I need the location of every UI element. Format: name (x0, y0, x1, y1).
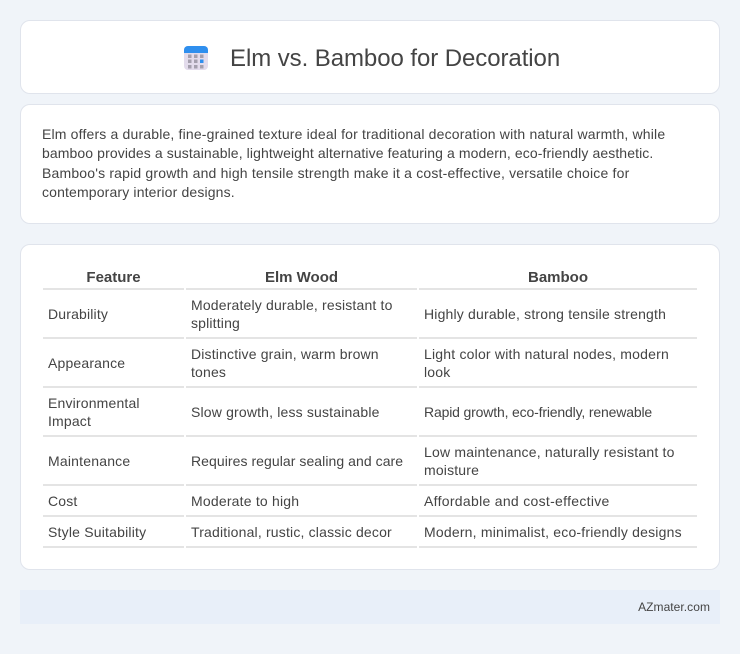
row: style suitability: Traditional, rustic, classic decor (191, 524, 392, 540)
row: durability (43, 297, 697, 339)
row: durability: Highly durable, strong tensile strength (424, 306, 666, 322)
row: environmental impact: Rapid growth, eco-friendly, renewable (424, 404, 652, 420)
row: environmental impact: Impact (48, 413, 91, 429)
table header: Bamboo (528, 269, 588, 286)
intro paragraph: contemporary interior designs. (42, 184, 235, 200)
intro paragraph: Elm offers a durable, fine-grained texture ideal for traditional decoration with natural warmth, while (42, 126, 665, 142)
icon: calendar (184, 46, 208, 70)
row: cost: Moderate to high (191, 493, 299, 509)
intro paragraph: bamboo provides a sustainable, lightweight alternative featuring a modern, eco-friendly aesthetic. (42, 145, 653, 161)
row: appearance: Appearance (48, 355, 125, 371)
footer bar (20, 590, 720, 624)
intro text panel (20, 104, 720, 224)
row: style suitability: Style Suitability (48, 524, 146, 540)
title card (20, 20, 720, 94)
comparison table panel (20, 244, 720, 570)
table header: Elm Wood (265, 269, 338, 286)
row: environmental impact: Slow growth, less sustainable (191, 404, 380, 420)
row: environmental impact (43, 395, 697, 437)
row: appearance: tones (191, 364, 226, 380)
row: cost: Affordable and cost-effective (424, 493, 610, 509)
row: maintenance: Maintenance (48, 453, 130, 469)
row: durability: Durability (48, 306, 108, 322)
footer credit: AZmater.com (638, 600, 710, 614)
row: maintenance (43, 444, 697, 486)
row: style suitability (43, 524, 697, 548)
row: appearance: Light color with natural nodes, modern (424, 346, 669, 362)
row: durability: splitting (191, 315, 240, 331)
table header (43, 269, 697, 290)
row: cost: Cost (48, 493, 77, 509)
row: appearance (43, 346, 697, 388)
row: style suitability: Modern, minimalist, eco-friendly designs (424, 524, 682, 540)
row: durability: Moderately durable, resistant to (191, 297, 393, 313)
intro paragraph (42, 126, 665, 200)
intro paragraph: Bamboo's rapid growth and high tensile strength make it a cost-effective, versatile choice for (42, 165, 629, 181)
row: environmental impact: Environmental (48, 395, 140, 411)
row: maintenance: Requires regular sealing and care (191, 453, 403, 469)
row: maintenance: Low maintenance, naturally resistant to (424, 444, 675, 460)
row: cost (43, 493, 697, 517)
title: Elm vs. Bamboo for Decoration (230, 45, 560, 72)
row: appearance: look (424, 364, 450, 380)
row: appearance: Distinctive grain, warm brown (191, 346, 379, 362)
row: maintenance: moisture (424, 462, 479, 478)
table header: Feature (86, 269, 141, 286)
